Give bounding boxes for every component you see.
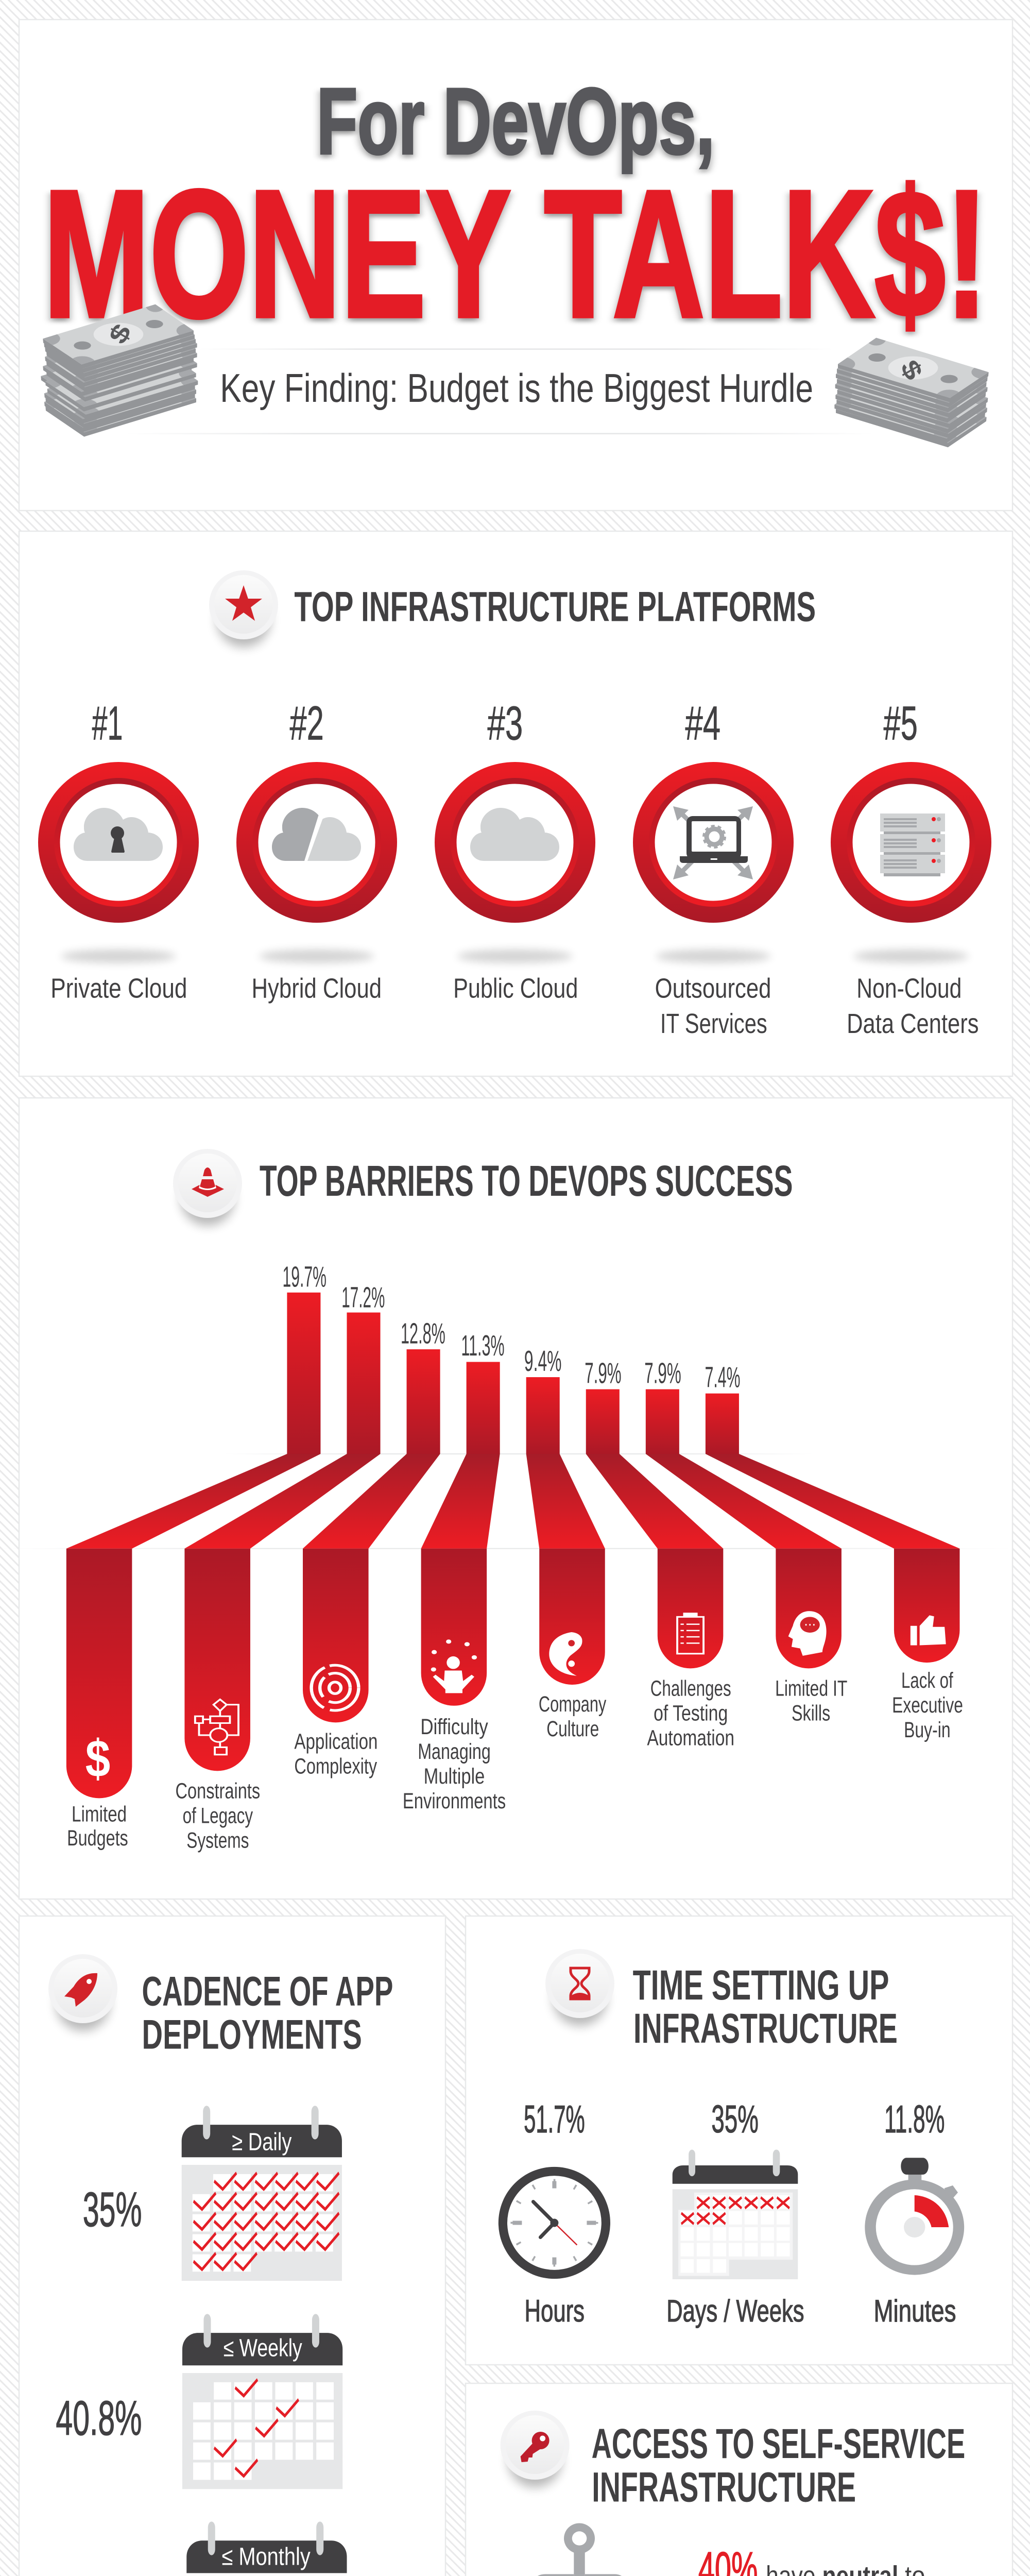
barrier labels: Lack of <box>901 1668 953 1693</box>
icon: juggler <box>431 1639 477 1693</box>
barrier labels <box>67 1668 963 1853</box>
barrier percentages: 19.7% <box>282 1261 327 1293</box>
barrier icons <box>85 1611 946 1788</box>
icon: right money stack: $ <box>895 355 929 385</box>
barrier labels: Complexity <box>294 1754 377 1778</box>
stats: time percentages: 51.7% <box>524 2097 585 2141</box>
icon: clipboard <box>677 1613 703 1654</box>
icon: right money stack <box>817 330 1006 451</box>
calendar: weekly: ≤ Weekly <box>224 2334 302 2362</box>
icon: star badge <box>209 570 278 647</box>
rank numbers: #4 <box>685 697 720 750</box>
barrier percentages: 17.2% <box>341 1281 385 1314</box>
stat: weekly percent: 40.8% <box>56 2391 142 2446</box>
barrier labels: Multiple <box>424 1764 485 1789</box>
chart: barrier ribbons <box>0 1293 1011 1798</box>
barrier labels: Difficulty <box>420 1715 488 1739</box>
stats: time percentages <box>524 2097 945 2141</box>
icon: outsourced IT ring <box>633 762 794 963</box>
barrier labels: Managing <box>418 1739 491 1764</box>
icon: hybrid cloud ring <box>236 762 397 963</box>
platform labels: Hybrid Cloud <box>252 973 382 1004</box>
rank numbers: #3 <box>487 697 523 750</box>
heading: access: ACCESS TO SELF-SERVICE <box>592 2420 965 2467</box>
icon: clock <box>499 2167 610 2279</box>
barrier labels: Limited <box>72 1802 127 1826</box>
barrier labels: Company <box>539 1692 607 1717</box>
icon: thumbs up <box>911 1615 946 1645</box>
barrier labels: Limited IT <box>775 1676 847 1701</box>
barrier labels: Systems <box>186 1828 249 1853</box>
icon: yin yang <box>549 1632 582 1676</box>
icon: flowchart <box>195 1700 238 1755</box>
icon: left money stack: $ <box>103 319 136 349</box>
barrier labels: Budgets <box>67 1826 128 1851</box>
stats: time percentages: 35% <box>711 2097 759 2141</box>
calendar: monthly <box>186 2521 347 2576</box>
panel: top infrastructure platforms: #5 <box>884 697 918 750</box>
icon: traffic cone badge <box>173 1149 242 1226</box>
barrier labels: Application <box>294 1729 377 1754</box>
platform labels: IT Services <box>660 1008 767 1039</box>
heading: time setting up <box>633 1961 898 2052</box>
platform labels: Outsourced <box>655 973 771 1004</box>
icon: network with pointer <box>519 2523 666 2576</box>
icon: private cloud ring <box>38 762 199 963</box>
calendar: weekly <box>182 2314 342 2489</box>
barrier labels: Culture <box>546 1717 599 1741</box>
barrier percentages: 11.3% <box>461 1330 505 1362</box>
heading: cadence: DEPLOYMENTS <box>142 2011 362 2058</box>
barrier percentages: 9.4% <box>524 1345 562 1377</box>
panel: time setting up infrastructure <box>466 1916 1012 2365</box>
heading: access <box>592 2420 965 2511</box>
stat: daily percent: 35% <box>83 2182 142 2236</box>
icon: rocket badge <box>48 1954 117 2031</box>
panel: top barriers to devops success: 7.4% <box>705 1361 740 1394</box>
barrier labels: Executive <box>892 1693 963 1718</box>
barrier labels: of Legacy <box>183 1803 253 1828</box>
platform labels: Public Cloud <box>453 973 578 1004</box>
time labels: Minutes <box>873 2294 956 2328</box>
barrier labels: Buy-in <box>904 1718 951 1742</box>
rank numbers: #1 <box>92 697 123 750</box>
barrier labels: Automation <box>647 1725 734 1750</box>
barrier percentages <box>282 1261 740 1394</box>
rank numbers <box>92 697 918 750</box>
text: 40 percent neutral to very difficult <box>698 2542 969 2576</box>
time labels: Days / Weeks <box>666 2294 804 2328</box>
rank numbers: #2 <box>289 697 324 750</box>
icon: key badge <box>501 2411 570 2487</box>
heading: access: INFRASTRUCTURE <box>592 2464 856 2511</box>
platform labels: Private Cloud <box>50 973 187 1004</box>
title: For DevOps, Money Talk$! <box>43 69 988 355</box>
panel: title header <box>19 20 1012 511</box>
icon: hourglass badge <box>545 1949 614 2026</box>
icon: dollar: $ <box>85 1730 110 1788</box>
icon: stopwatch <box>865 2158 964 2275</box>
heading: time setting up: TIME SETTING UP <box>633 1961 889 2009</box>
icon: calendar with crosses <box>673 2149 798 2279</box>
barrier labels: Challenges <box>650 1676 731 1701</box>
heading: time setting up: INFRASTRUCTURE <box>633 2005 898 2052</box>
heading: cadence <box>142 1968 393 2058</box>
barrier percentages: 12.8% <box>401 1317 445 1350</box>
barrier labels: Skills <box>792 1701 830 1725</box>
calendar: daily: ≥ Daily <box>232 2128 291 2156</box>
heading: cadence: CADENCE OF APP <box>142 1968 393 2015</box>
icon: left money stack <box>24 297 215 440</box>
platform labels <box>50 973 978 1039</box>
calendar: daily <box>182 2106 342 2281</box>
time labels: Hours <box>525 2294 585 2328</box>
icon: maze <box>312 1665 358 1710</box>
icon: public cloud ring <box>435 762 595 963</box>
barrier labels: of Testing <box>654 1701 728 1725</box>
panel: cadence of app deployments <box>19 1916 445 2576</box>
barrier labels: Constraints <box>176 1778 260 1803</box>
icon: non-cloud data center ring <box>831 762 991 963</box>
panel: access to self-service infrastructure <box>466 2383 1012 2576</box>
icon: head <box>788 1611 827 1656</box>
panel: top infrastructure platforms <box>19 531 1012 1076</box>
panel: top barriers to devops success <box>0 1098 1012 1899</box>
time labels <box>525 2294 956 2328</box>
stats: time percentages: 11.8% <box>884 2097 945 2141</box>
barrier percentages: 7.9% <box>585 1357 622 1389</box>
calendar: monthly: ≤ Monthly <box>222 2543 311 2570</box>
barrier labels: Environments <box>403 1789 506 1814</box>
barrier percentages: 7.9% <box>644 1357 681 1389</box>
